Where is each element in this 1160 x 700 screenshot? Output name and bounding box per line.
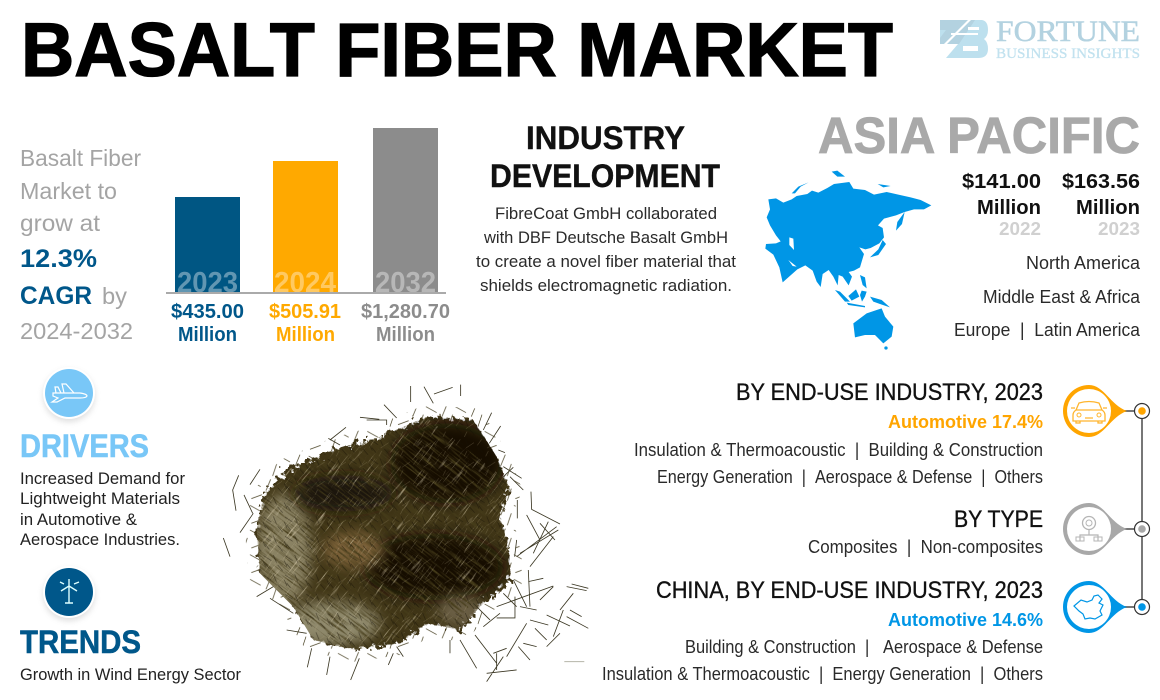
icon: car pin: [1063, 385, 1127, 437]
bar chart: 2023: [177, 267, 238, 299]
CAGR text block: [20, 145, 141, 344]
title: BASALT FIBER MARKET: [21, 8, 893, 93]
icon: China map pin: [1063, 581, 1127, 633]
bar chart: $435.00: [171, 301, 244, 323]
CAGR text block: grow at: [20, 210, 101, 236]
section: by end-use industry: [634, 379, 1043, 487]
Asia Pacific values: 2022: [999, 219, 1041, 239]
bar chart: [166, 128, 450, 346]
bar chart: 2024: [274, 267, 336, 299]
icon: gear network pin: [1063, 503, 1127, 555]
logo: Fortune Business Insights: BUSINESS INSIGHTS: [996, 46, 1140, 62]
Asia Pacific values: [962, 171, 1140, 239]
section: China by end-use industry: Automotive 14.6%: [888, 610, 1043, 630]
CAGR text block: 12.3%: [20, 245, 97, 273]
Asia Pacific values: 2023: [1098, 219, 1140, 239]
Asia Pacific values: $163.56: [1062, 171, 1140, 193]
bar chart: $1,280.70: [361, 301, 450, 323]
CAGR text block: Basalt Fiber: [20, 145, 141, 171]
Asia Pacific values: $141.00: [962, 171, 1041, 193]
bar chart: $505.91: [269, 301, 341, 323]
section: by type: [808, 506, 1043, 557]
industry development text: FibreCoat GmbH collaborated: [495, 204, 717, 223]
section: by end-use industry: BY END-USE INDUSTRY, 2023: [736, 379, 1043, 406]
section: by type: BY TYPE: [954, 506, 1043, 533]
CAGR text block: by: [102, 283, 128, 309]
section: by type: Composites | Non-composites: [808, 537, 1043, 557]
drivers heading: DRIVERS: [20, 428, 149, 464]
icon: drivers airplane: [43, 367, 95, 422]
industry development text: shields electromagnetic radiation.: [480, 276, 732, 295]
drivers text: Increased Demand for: [20, 469, 185, 488]
CAGR text block: CAGR: [20, 282, 92, 310]
section: China by end-use industry: Building & Construction | Aerospace & Defense: [685, 637, 1043, 657]
timeline connector: [1124, 404, 1150, 614]
trends text: Growth in Wind Energy Sector: [20, 665, 241, 684]
section: by end-use industry: Insulation & Thermoacoustic | Building & Construction: [634, 440, 1043, 460]
drivers text: Aerospace Industries.: [20, 530, 180, 549]
section: China by end-use industry: Insulation & Thermoacoustic | Energy Generation | Others: [602, 664, 1043, 684]
other regions list: Europe | Latin America: [954, 320, 1141, 340]
other regions list: [954, 253, 1141, 340]
CAGR text block: Market to: [20, 178, 117, 204]
drivers text: in Automotive &: [20, 510, 138, 529]
logo: Fortune Business Insights: [940, 15, 1140, 62]
bar chart: Million: [276, 324, 335, 346]
industry development text: to create a novel fiber material that: [476, 252, 736, 271]
industry development heading: INDUSTRY: [526, 120, 685, 156]
bar chart: Million: [376, 324, 435, 346]
other regions list: Middle East & Africa: [983, 287, 1141, 307]
section: China by end-use industry: [602, 577, 1043, 684]
industry development text: with DBF Deutsche Basalt GmbH: [483, 228, 728, 247]
industry development text: [476, 204, 736, 295]
industry development heading: [490, 120, 720, 194]
trends heading: TRENDS: [20, 624, 141, 660]
section: China by end-use industry: CHINA, BY END-USE INDUSTRY, 2023: [656, 577, 1043, 604]
icon: trends wind turbine: [43, 566, 95, 621]
photo: basalt fiber pile: [223, 384, 588, 682]
stray fibers: [223, 385, 588, 682]
other regions list: North America: [1026, 253, 1141, 273]
industry development heading: DEVELOPMENT: [490, 158, 720, 194]
drivers text: Lightweight Materials: [20, 489, 180, 508]
drivers text: [20, 469, 185, 549]
icon: Asia Pacific map: [765, 171, 931, 350]
section: by end-use industry: Automotive 17.4%: [888, 412, 1043, 432]
CAGR text block: 2024-2032: [20, 318, 133, 344]
Asia Pacific values: Million: [1076, 197, 1140, 219]
bar chart: 2032: [375, 267, 436, 299]
region heading: Asia Pacific: ASIA PACIFIC: [818, 107, 1140, 164]
bar chart: Million: [178, 324, 237, 346]
logo: Fortune Business Insights: FORTUNE: [996, 15, 1140, 48]
section: by end-use industry: Energy Generation | Aerospace & Defense | Others: [657, 467, 1043, 487]
Asia Pacific values: Million: [977, 197, 1041, 219]
